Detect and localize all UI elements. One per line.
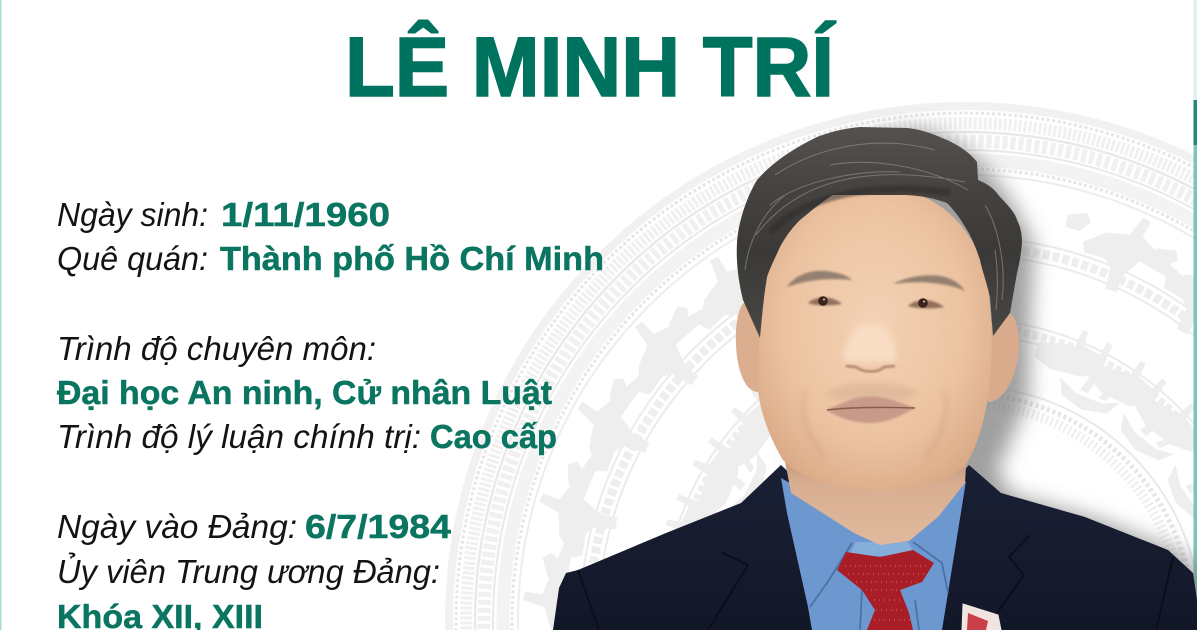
shirt (781, 478, 966, 630)
home town: Thành phố Hồ Chí Minh (220, 241, 604, 278)
biography text block (57, 196, 604, 630)
right edge accent (1194, 0, 1197, 630)
right ear (982, 313, 1019, 402)
shirt collar shadows (810, 542, 948, 630)
professional qualification: Trình độ chuyên môn: (57, 330, 376, 367)
political theory level: Trình độ lý luận chính trị: (57, 418, 421, 455)
left eyebrow (787, 271, 852, 287)
birth date: 1/11/1960 (221, 197, 390, 234)
home town (57, 240, 604, 278)
party admission date: Ngày vào Đảng: (57, 508, 297, 545)
professional qualification: Đại học An ninh, Cử nhân Luật (57, 375, 552, 412)
party admission date (57, 508, 451, 546)
jacket lapel seams (578, 535, 1173, 630)
cheek shading (804, 390, 946, 458)
mouth (827, 397, 915, 423)
neck (783, 450, 967, 545)
left edge accent (0, 0, 2, 630)
undershirt fold (848, 542, 916, 556)
nose (844, 325, 896, 372)
hair (737, 127, 1022, 338)
right eyebrow (893, 275, 965, 291)
left ear (736, 300, 770, 392)
hair highlights (745, 143, 1003, 310)
moustache shadow (825, 382, 920, 400)
party pin (962, 604, 1001, 630)
face (758, 185, 992, 490)
hair dark band (770, 189, 950, 232)
political theory level: Cao cấp (430, 419, 557, 456)
portrait (553, 127, 1197, 630)
drum motifs: outer band of birds (519, 186, 1197, 630)
central committee membership (57, 552, 440, 630)
left eye (808, 296, 842, 306)
home town: Quê quán: (57, 240, 208, 277)
professional qualification (57, 330, 552, 412)
party admission date: 6/7/1984 (305, 509, 451, 546)
central committee membership: Ủy viên Trung ương Đảng: (57, 552, 440, 590)
right eye (908, 298, 944, 308)
birth date: Ngày sinh: (57, 196, 208, 233)
jacket (553, 465, 1197, 630)
bronze drum background (449, 106, 1197, 630)
title: LÊ MINH TRÍ (345, 20, 837, 114)
drum motifs: middle band of deer (649, 317, 1197, 630)
portrait drop shadow (772, 130, 1197, 630)
birth date (57, 196, 390, 234)
drum motifs: inner band of boats (686, 361, 1197, 630)
tie (837, 550, 934, 630)
